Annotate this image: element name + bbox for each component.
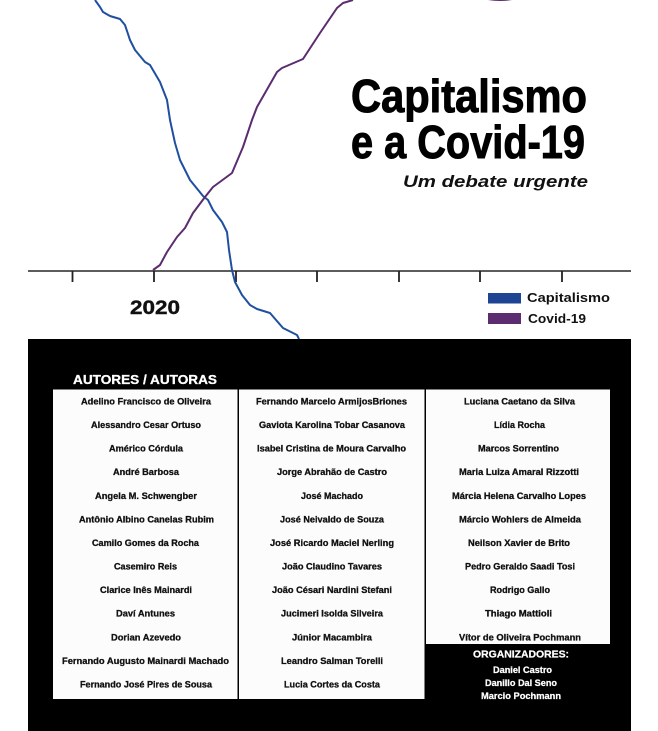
organizers block: Marcio Pochmann — [481, 691, 561, 701]
panel: authors column 2: Fernando Marcelo ArmijosBriones — [256, 396, 407, 406]
year label: 2020 — [130, 298, 180, 319]
line: covid-19 — [153, 0, 353, 270]
panel: authors column 3: Luciana Caetano da Silva — [464, 396, 576, 406]
panel: authors column 3: Lídia Rocha — [494, 420, 546, 430]
panel: authors column 2: Lucia Cortes da Costa — [284, 680, 381, 690]
panel: authors column 1: Angela M. Schwengber — [95, 491, 197, 501]
chart: capitalism and covid lines with time axis — [28, 0, 631, 339]
panel: black authors background — [28, 339, 631, 731]
time axis with ticks — [28, 271, 631, 282]
legend: Capitalismo — [527, 290, 610, 305]
organizers block: ORGANIZADORES: — [473, 650, 569, 660]
panel: authors column 2: José Neivaldo de Souza — [280, 514, 385, 524]
panel: authors column 2: Jorge Abrahão de Castro — [277, 467, 387, 477]
panel: authors column 2: Jucimeri Isolda Silveira — [281, 609, 384, 619]
panel: authors column 2: João Césari Nardini Stefani — [272, 585, 392, 595]
panel: authors column 2 — [239, 390, 424, 699]
panel: authors column 1: Dorian Azevedo — [111, 632, 181, 642]
panel: authors column 3: Márcio Wohlers de Almeida — [459, 514, 582, 524]
panel: authors column 1: Clarice Inês Mainardi — [100, 585, 192, 595]
panel: authors column 1: Casemiro Reis — [114, 562, 177, 572]
panel: authors column 2: João Claudino Tavares — [282, 562, 382, 572]
panel: authors column 2: Júnior Macambira — [292, 632, 373, 642]
panel: authors column 3: Vítor de Oliveira Pochmann — [459, 632, 581, 642]
organizers block: Daniel Castro — [493, 665, 552, 675]
panel: authors column 1: Camilo Gomes da Rocha — [92, 538, 200, 548]
organizers block: Danillo Dal Seno — [485, 678, 557, 688]
panel: authors column 2: Isabel Cristina de Moura Carvalho — [257, 444, 406, 454]
title — [351, 70, 587, 168]
panel: authors column 3: Maria Luiza Amaral Rizzotti — [459, 467, 579, 477]
legend — [488, 290, 610, 326]
panel: authors column 1: Antônio Albino Canelas Rubim — [79, 514, 214, 524]
subtitle: Um debate urgente — [403, 172, 588, 191]
panel: authors column 2: José Machado — [301, 491, 363, 501]
panel: authors column 1 — [53, 390, 238, 699]
panel: authors column 1: Alessandro Cesar Ortuso — [91, 420, 201, 430]
panel: authors column 1: Américo Córdula — [109, 444, 184, 454]
panel: authors column 3: Rodrigo Gallo — [490, 585, 550, 595]
legend: Covid-19 — [528, 311, 586, 326]
panel: authors column 2: José Ricardo Maciel Nerling — [270, 538, 394, 548]
panel: authors column 3 — [426, 390, 610, 644]
panel: authors column 2: Gaviota Karolina Tobar Casanova — [259, 420, 406, 430]
organizers block — [473, 650, 569, 701]
panel: authors column 3: Neilson Xavier de Brito — [468, 538, 570, 548]
title: e a Covid-19 — [351, 116, 585, 168]
panel: authors column 3: Thiago Mattioli — [485, 609, 552, 619]
panel: authors column 1: Daví Antunes — [116, 609, 175, 619]
panel: authors column 1: André Barbosa — [113, 467, 180, 477]
title: Capitalismo — [351, 70, 587, 122]
panel: authors column 2: Leandro Salman Torelli — [281, 656, 383, 666]
panel: authors column 1: Fernando Augusto Mainardi Machado — [62, 656, 229, 666]
line: capitalismo — [95, 0, 299, 339]
panel: authors column 3: Marcos Sorrentino — [478, 444, 559, 454]
heading: authors: AUTORES / AUTORAS — [73, 373, 217, 387]
panel: authors column 3: Márcia Helena Carvalho Lopes — [452, 491, 586, 501]
panel: authors column 1: Adelino Francisco de Oliveira — [81, 396, 212, 406]
panel: authors column 3: Pedro Geraldo Saadi Tosi — [465, 562, 575, 572]
line fragment: covid-19 at top edge — [488, 0, 512, 1]
panel: authors column 1: Fernando José Pires de Sousa — [80, 680, 213, 690]
